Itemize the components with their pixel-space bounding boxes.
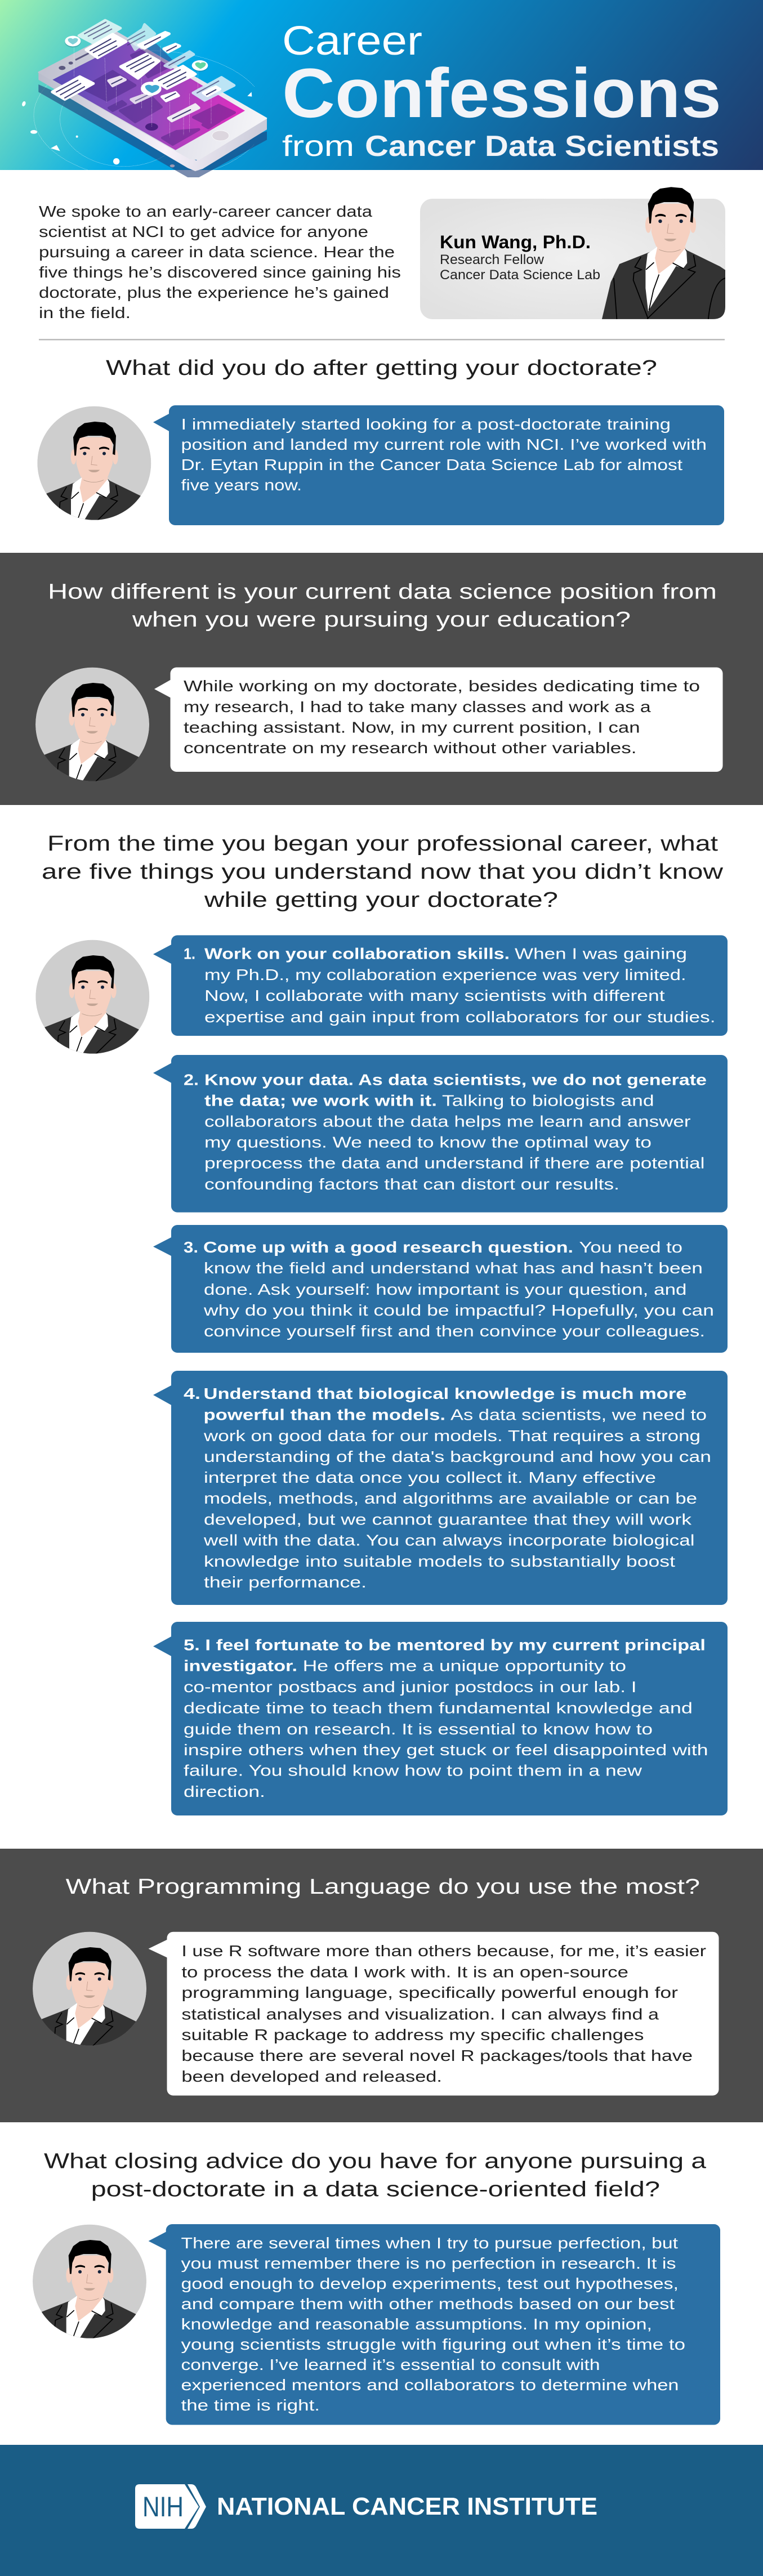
speech bubble: lesson 4: developed, but we cannot guarantee that they will work: [204, 1510, 691, 1528]
speech bubble: lesson 3: Come up with a good research question.: [203, 1238, 573, 1256]
speech bubble: answer 1: five years now.: [181, 476, 302, 494]
intro text block: scientist at NCI to get advice for anyone: [39, 223, 368, 240]
title: Career: [282, 19, 422, 64]
speech bubble: lesson 5: dedicate time to teach them fundamental knowledge and: [184, 1700, 693, 1717]
speech bubble: lesson 5: inspire others when they get stuck or feel disappointed with: [184, 1741, 708, 1759]
speech bubble: answer 4: suitable R package to address my specific challenges: [181, 2026, 644, 2043]
heading: question 2: [48, 580, 717, 632]
speech bubble: answer 4: programming language, specifically powerful enough for: [181, 1984, 678, 2001]
intro text block: in the field.: [39, 304, 131, 321]
avatar: question 2: [35, 668, 149, 781]
speech bubble: answer 2: teaching assistant. Now, in my current position, I can: [184, 719, 640, 736]
speech bubble: answer 1: [153, 405, 724, 525]
speech bubble: lesson 5: investigator.: [184, 1657, 297, 1675]
speech bubble: lesson 4: well with the data. You can always incorporate biological: [203, 1532, 695, 1549]
heading: question 1: What did you do after getting your doctorate?: [106, 356, 657, 380]
intro text block: [39, 203, 401, 321]
title: Confessions: [282, 55, 721, 132]
heading: question 5: [44, 2150, 707, 2202]
speech bubble: lesson 5: direction.: [184, 1783, 265, 1800]
speech bubble: lesson 1: [153, 935, 728, 1036]
panel: question 4 dark section: [0, 1849, 763, 2122]
speech bubble: lesson 4: their performance.: [204, 1573, 367, 1591]
speech bubble: lesson 1: When I was gaining: [515, 945, 687, 963]
speech bubble: lesson 4: 4.: [184, 1385, 200, 1402]
speech bubble: answer 4: to process the data I work with. It is an open-source: [181, 1964, 628, 1980]
speech bubble: answer 5: young scientists struggle with figuring out when it’s time to: [181, 2336, 685, 2353]
speech bubble: answer 5: good enough to develop experiments, test out hypotheses,: [181, 2275, 679, 2292]
speech bubble: answer 2: [154, 668, 723, 772]
speech bubble: answer 4: I use R software more than others because, for me, it’s easier: [181, 1942, 706, 1960]
speech bubble: lesson 3: why do you think it could be impactful? Hopefully, you can: [203, 1302, 714, 1319]
speech bubble: answer 1: I immediately started looking for a post-doctorate training: [181, 415, 671, 433]
speech bubble: answer 1: Dr. Eytan Ruppin in the Cancer Data Science Lab for almost: [181, 456, 682, 473]
icon: NIH logo: NIH: [142, 2491, 184, 2523]
speech bubble: lesson 2: 2.: [184, 1071, 199, 1089]
speech bubble: lesson 5: He offers me a unique opportunity to: [303, 1657, 626, 1675]
speech bubble: lesson 4: work on good data for our models. That requires a strong: [203, 1427, 700, 1444]
title: [282, 19, 721, 163]
name and role: Kun Wang, Ph.D.: [440, 232, 591, 252]
speech bubble: lesson 5: [153, 1622, 728, 1815]
heading: question 4: What Programming Language do you use the most?: [66, 1875, 700, 1899]
title: from: [282, 130, 354, 163]
speech bubble: lesson 4: As data scientists, we need to: [450, 1406, 707, 1423]
avatar: question 3: [36, 940, 150, 1054]
speech bubble: lesson 4: models, methods, and algorithms are available or can be: [204, 1490, 697, 1507]
speech bubble: lesson 2: [153, 1055, 728, 1213]
speech bubble: lesson 1: 1.: [184, 945, 195, 963]
name and role: Research Fellow: [440, 252, 545, 267]
speech bubble: lesson 2: collaborators about the data helps me learn and answer: [204, 1112, 690, 1130]
name and role: Cancer Data Science Lab: [440, 267, 600, 283]
speech bubble: lesson 5: 5. I feel fortunate to be mentored by my current principal: [184, 1636, 706, 1654]
speech bubble: answer 4: been developed and released.: [181, 2068, 442, 2085]
speech bubble: answer 5: There are several times when I try to pursue perfection, but: [181, 2234, 678, 2252]
avatar: question 4: [33, 1932, 146, 2046]
heading: question 2: when you were pursuing your education?: [132, 608, 631, 632]
name and role: [440, 232, 600, 283]
organization name: NATIONAL CANCER INSTITUTE: [217, 2493, 597, 2520]
heading: question 5: post-doctorate in a data science-oriented field?: [91, 2178, 660, 2202]
speech bubble: answer 2: While working on my doctorate, besides dedicating time to: [184, 677, 700, 695]
speech bubble: lesson 3: know the field and understand what has and hasn’t been: [204, 1259, 703, 1277]
intro text block: pursuing a career in data science. Hear the: [39, 243, 395, 261]
speech bubble: lesson 4: Understand that biological knowledge is much more: [204, 1385, 687, 1402]
speech bubble: lesson 4: interpret the data once you collect it. Many effective: [204, 1469, 656, 1486]
heading: question 5: What closing advice do you have for anyone pursuing a: [44, 2150, 707, 2174]
speech bubble: answer 5: knowledge and reasonable assumptions. In my opinion,: [181, 2315, 652, 2333]
speech bubble: lesson 3: [153, 1225, 728, 1353]
speech bubble: answer 1: position and landed my current role with NCI. I’ve worked with: [181, 436, 707, 453]
speech bubble: lesson 2: my questions. We need to know the optimal way to: [204, 1134, 652, 1151]
panel: footer: [0, 2445, 763, 2576]
heading: question 2: How different is your current data science position from: [48, 580, 717, 603]
speech bubble: lesson 3: 3.: [184, 1238, 198, 1256]
speech bubble: lesson 3: convince yourself first and then convince your colleagues.: [204, 1322, 705, 1340]
speech bubble: answer 5: the time is right.: [181, 2396, 320, 2414]
speech bubble: lesson 2: Talking to biologists and: [442, 1092, 654, 1110]
icon: NIH logo: [135, 2484, 206, 2529]
illustration: isometric smartphone with message bubbles: [21, 20, 267, 180]
speech bubble: lesson 1: my Ph.D., my collaboration experience was very limited.: [204, 966, 686, 983]
speech bubble: answer 5: and compare them with other methods based on our best: [181, 2295, 675, 2313]
title: Cancer Data Scientists: [365, 130, 719, 163]
speech bubble: lesson 1: Now, I collaborate with many scientists with different: [204, 987, 665, 1004]
speech bubble: answer 4: statistical analyses and visualization. I can always find a: [181, 2005, 659, 2023]
portrait: Kun Wang: [602, 187, 725, 319]
speech bubble: lesson 2: Know your data. As data scientists, we do not generate: [204, 1071, 707, 1089]
intro text block: doctorate, plus the experience he’s gained: [39, 284, 389, 301]
speech bubble: lesson 2: confounding factors that can distort our results.: [204, 1175, 619, 1193]
heading: question 3: are five things you understand now that you didn’t know: [42, 860, 724, 884]
speech bubble: lesson 4: powerful than the models.: [204, 1406, 445, 1423]
speech bubble: lesson 1: Work on your collaboration skills.: [204, 945, 510, 963]
speech bubble: answer 5: [149, 2224, 720, 2425]
speech bubble: answer 2: concentrate on my research without other variables.: [184, 739, 636, 757]
speech bubble: answer 5: experienced mentors and collaborators to determine when: [181, 2376, 679, 2394]
speech bubble: lesson 3: done. Ask yourself: how important is your question, and: [204, 1281, 687, 1298]
intro text block: five things he’s discovered since gaining his: [39, 263, 401, 281]
speech bubble: lesson 5: guide them on research. It is essential to know how to: [184, 1720, 653, 1738]
speech bubble: lesson 5: co-mentor postbacs and junior postdocs in our lab. I: [184, 1678, 636, 1696]
speech bubble: answer 4: [149, 1932, 719, 2095]
heading: question 3: while getting your doctorate?: [204, 888, 558, 912]
speech bubble: answer 5: converge. I’ve learned it’s essential to consult with: [181, 2356, 600, 2373]
speech bubble: lesson 4: knowledge into suitable models to substantially boost: [204, 1553, 675, 1570]
panel: question 2 dark section: [0, 553, 763, 806]
heading: question 3: [42, 832, 724, 912]
avatar: question 1: [37, 406, 151, 520]
intro text block: We spoke to an early-career cancer data: [39, 203, 372, 220]
speech bubble: lesson 5: failure. You should know how to point them in a new: [184, 1762, 642, 1779]
speech bubble: lesson 3: You need to: [579, 1238, 682, 1256]
speech bubble: lesson 4: [153, 1371, 728, 1605]
speech bubble: answer 2: my research, I had to take many classes and work as a: [184, 698, 651, 715]
speech bubble: lesson 2: the data; we work with it.: [204, 1092, 437, 1110]
heading: question 3: From the time you began your professional career, what: [47, 832, 719, 856]
speech bubble: answer 4: because there are several novel R packages/tools that have: [181, 2047, 693, 2064]
header banner: [0, 0, 763, 180]
speech bubble: lesson 4: understanding of the data's background and how you can: [204, 1448, 711, 1465]
avatar: question 5: [33, 2225, 146, 2338]
speech bubble: answer 5: you must remember there is no perfection in research. It is: [181, 2255, 676, 2272]
speech bubble: lesson 1: expertise and gain input from collaborators for our studies.: [204, 1008, 715, 1026]
speech bubble: lesson 2: preprocess the data and understand if there are potential: [204, 1155, 705, 1172]
panel: profile card: [420, 187, 725, 319]
